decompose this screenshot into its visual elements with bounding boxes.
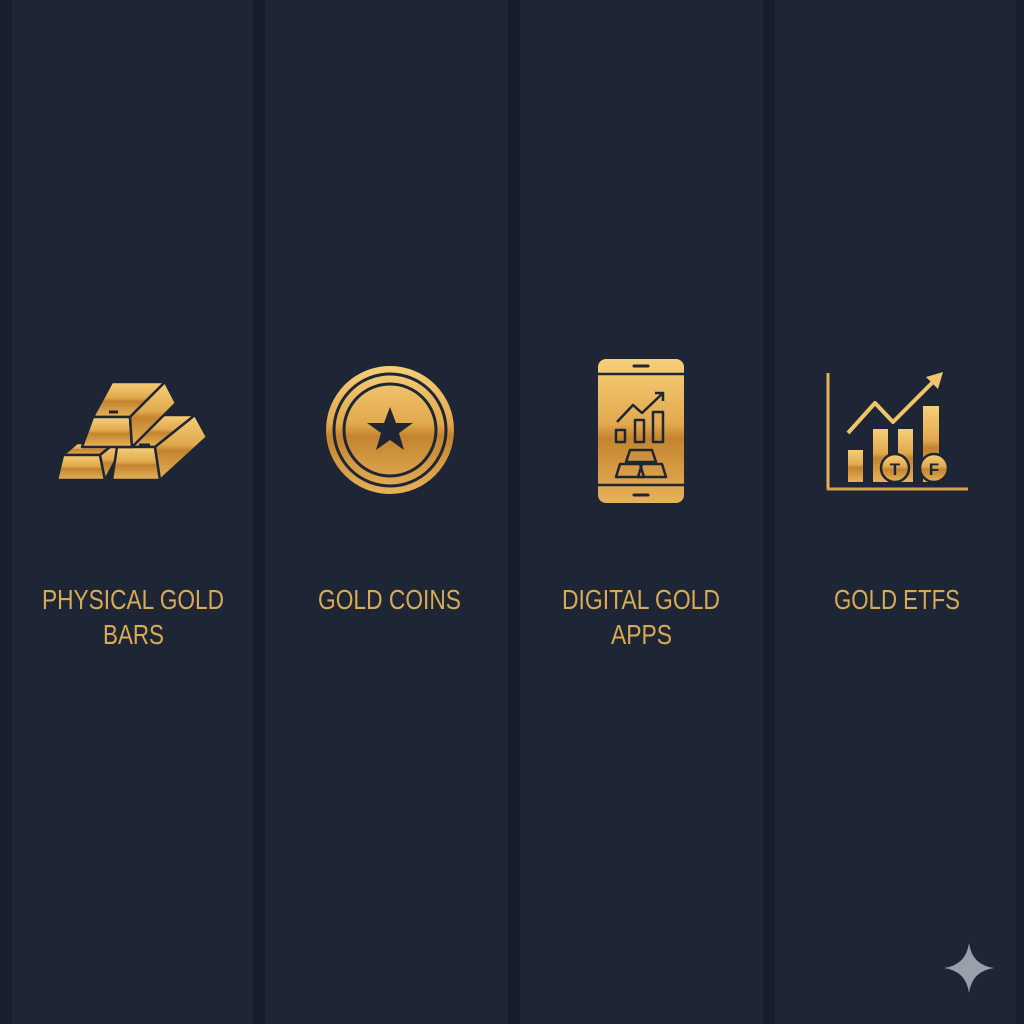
label: gold coins: GOLD COINS <box>318 584 461 615</box>
icon: ETF chart: T <box>890 460 901 479</box>
icon: sparkle <box>944 943 994 993</box>
label: digital gold apps: APPS <box>611 619 672 650</box>
label: gold etfs: GOLD ETFS <box>834 584 960 615</box>
icon: digital gold phone <box>598 359 684 503</box>
icon: gold bars <box>57 382 207 480</box>
label: digital gold apps: DIGITAL GOLD <box>562 584 720 615</box>
icon: ETF chart <box>827 372 968 490</box>
icon: ETF chart: F <box>929 460 939 479</box>
icon: gold coin <box>326 366 454 494</box>
label: physical gold bars: PHYSICAL GOLD <box>42 584 224 615</box>
label: physical gold bars: BARS <box>103 619 164 650</box>
